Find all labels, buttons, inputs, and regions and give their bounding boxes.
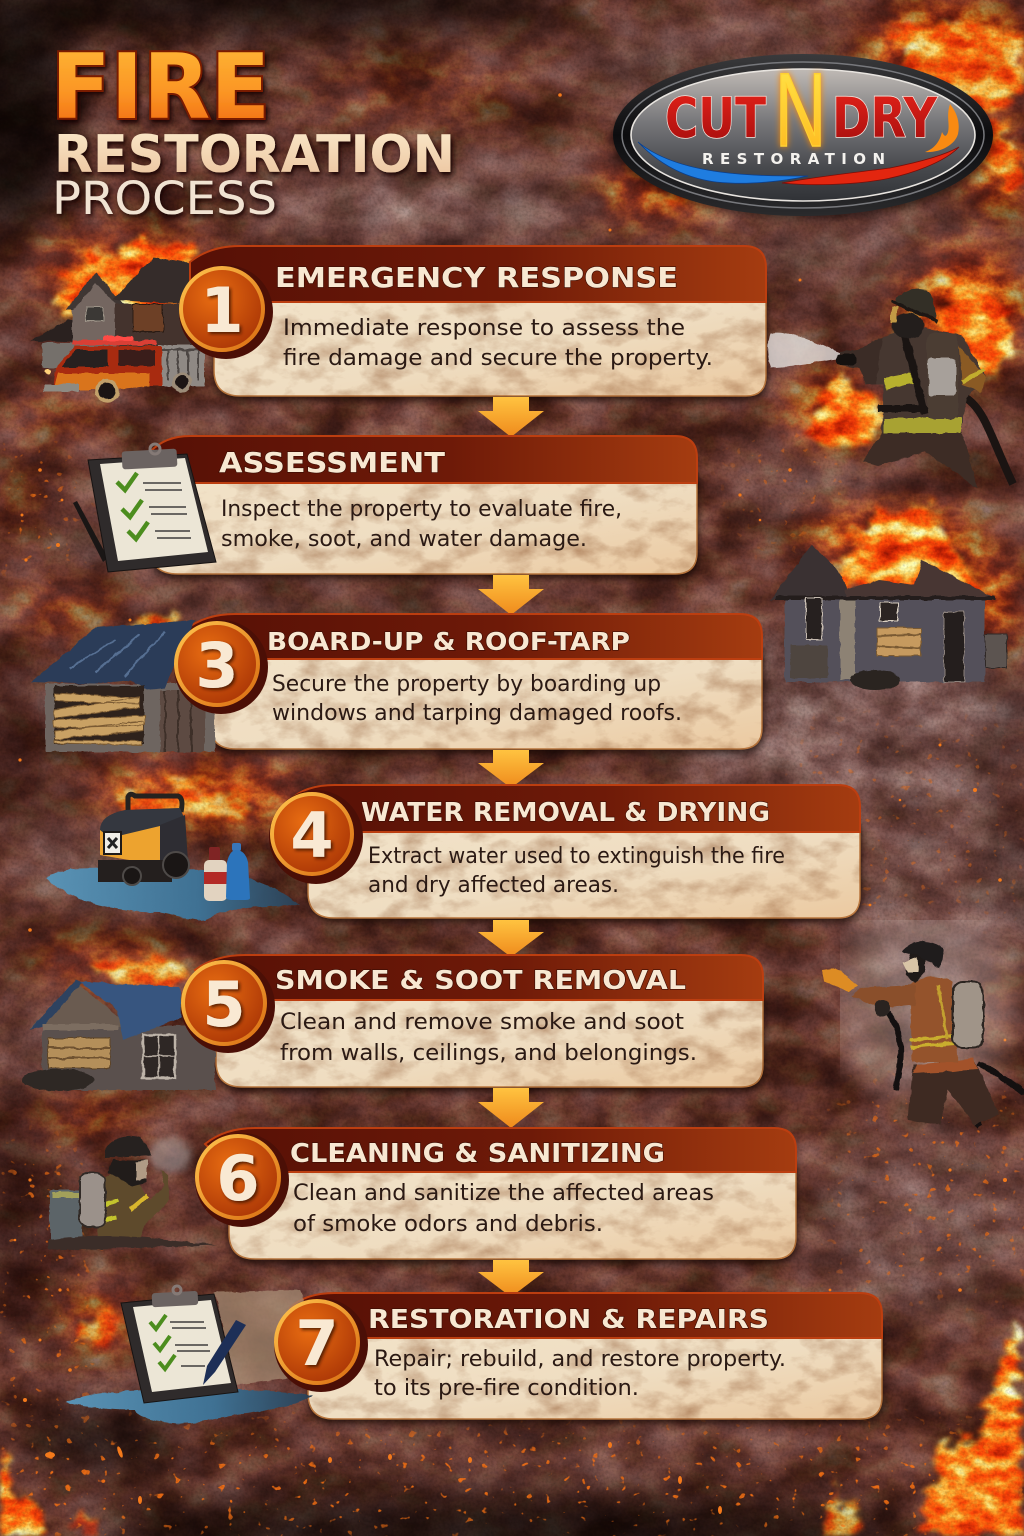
firefighter body (822, 942, 1000, 1125)
fire truck (44, 336, 205, 401)
number badge (195, 1133, 289, 1227)
number badge 3 (174, 620, 268, 714)
heading: EMERGENCY RESPONSE (275, 261, 678, 294)
house (30, 257, 205, 368)
title (51, 35, 455, 225)
description: smoke, soot, and water damage. (221, 526, 587, 552)
arrow 2 (478, 575, 544, 615)
description: Inspect the property to evaluate fire, (221, 496, 622, 522)
illustration: kneeling firefighter (48, 1136, 218, 1250)
water spray (768, 333, 842, 368)
heading: WATER REMOVAL & DRYING (361, 798, 770, 828)
logo: Cut N Dry Restoration badge (611, 52, 995, 220)
illustration: firefighter spraying hose (768, 289, 1013, 488)
panel 3: board-up and roof-tarp (185, 614, 762, 749)
panel header (205, 1128, 796, 1172)
panel header (190, 246, 766, 302)
description: windows and tarping damaged roofs. (272, 700, 682, 726)
arrow 1 (478, 397, 544, 437)
heading: RESTORATION & REPAIRS (368, 1305, 769, 1335)
number badge: 4 (290, 799, 334, 872)
heading: ASSESSMENT (219, 446, 445, 479)
panel header (185, 614, 762, 659)
arrow 3 (478, 750, 544, 788)
description: to its pre-fire condition. (374, 1375, 639, 1401)
panel header (290, 1293, 882, 1338)
arrow 4 (478, 920, 544, 957)
logo word: DRY: DRY (832, 86, 938, 150)
panel 2: assessment (150, 436, 697, 574)
hoses (888, 1012, 1024, 1127)
number badge 7 (274, 1298, 368, 1392)
panel header (290, 785, 860, 832)
description: Clean and remove smoke and soot (280, 1009, 684, 1035)
panel header (195, 955, 763, 1000)
heading: CLEANING & SANITIZING (290, 1139, 665, 1169)
panel body (214, 290, 766, 396)
arrow 5 (478, 1088, 544, 1128)
panel body (210, 648, 762, 749)
panel body (229, 1160, 796, 1259)
number badge 7: 7 (295, 1307, 339, 1380)
panel 5: smoke and soot removal (195, 955, 763, 1087)
panel 1: emergency response (179, 246, 766, 396)
panel body (216, 990, 763, 1087)
rubble (48, 1236, 218, 1250)
bricks and papers (215, 1290, 310, 1385)
cleaner bottles (204, 843, 250, 901)
title line: FIRE: FIRE (51, 35, 270, 140)
description: Immediate response to assess the (283, 315, 685, 341)
smoke panel behind firefighter (840, 920, 1024, 1125)
panel body (308, 820, 860, 918)
water puddle (65, 1388, 313, 1423)
description: Secure the property by boarding up (272, 671, 661, 697)
description: Repair; rebuild, and restore property. (374, 1346, 786, 1372)
illustration: house with tarp (22, 980, 215, 1091)
panel 4: water removal and drying (269, 785, 860, 918)
clipboard (121, 1286, 246, 1403)
illustration: burning house and fire truck (30, 257, 205, 401)
logo word: RESTORATION: RESTORATION (702, 150, 885, 168)
icon: clipboard with checklist (73, 444, 216, 572)
number badge (269, 790, 363, 884)
logo swoosh: red (782, 147, 959, 185)
smoke puff (148, 1137, 192, 1173)
panel body (308, 1325, 882, 1419)
number badge: 6 (216, 1142, 260, 1215)
description: and dry affected areas. (368, 872, 619, 898)
illustration: water extractor, bottles and puddle (45, 794, 300, 920)
heading: SMOKE & SOOT REMOVAL (275, 966, 686, 996)
number badge 5: 5 (202, 968, 246, 1041)
firefighter body (836, 289, 986, 488)
heading: BOARD-UP & ROOF-TARP (267, 627, 630, 656)
panel 6: cleaning and sanitizing (195, 1128, 796, 1259)
illustration: clipboard, bricks and puddle (65, 1286, 313, 1423)
panel body (150, 470, 697, 574)
water puddle (45, 868, 300, 920)
logo flame (925, 104, 959, 152)
title line: RESTORATION: RESTORATION (54, 125, 455, 185)
arrow 6 (478, 1260, 544, 1297)
panel header (150, 436, 697, 483)
description: fire damage and secure the property. (283, 345, 713, 371)
logo word: CUT: CUT (665, 86, 766, 150)
title line: PROCESS: PROCESS (52, 172, 277, 225)
number badge 5 (181, 959, 275, 1053)
logo swoosh: blue (638, 142, 808, 183)
number badge 3: 3 (195, 629, 239, 702)
panel 7: restoration and repairs (290, 1293, 882, 1419)
illustration: boarded-up shed with tarp (31, 620, 215, 752)
logo word: N flame: N (775, 52, 826, 169)
illustration: burning house (770, 545, 1007, 690)
firefighter body (80, 1136, 170, 1240)
description: Extract water used to extinguish the fire (368, 843, 785, 869)
number badge (179, 265, 273, 359)
hose (966, 398, 1013, 484)
description: of smoke odors and debris. (293, 1211, 603, 1237)
description: Clean and sanitize the affected areas (293, 1180, 714, 1206)
illustration: firefighter with nozzle in smoke (822, 942, 1024, 1127)
extractor machine (98, 794, 189, 885)
number badge: 1 (200, 274, 244, 347)
debris bin (50, 1190, 82, 1240)
description: from walls, ceilings, and belongings. (280, 1040, 697, 1066)
